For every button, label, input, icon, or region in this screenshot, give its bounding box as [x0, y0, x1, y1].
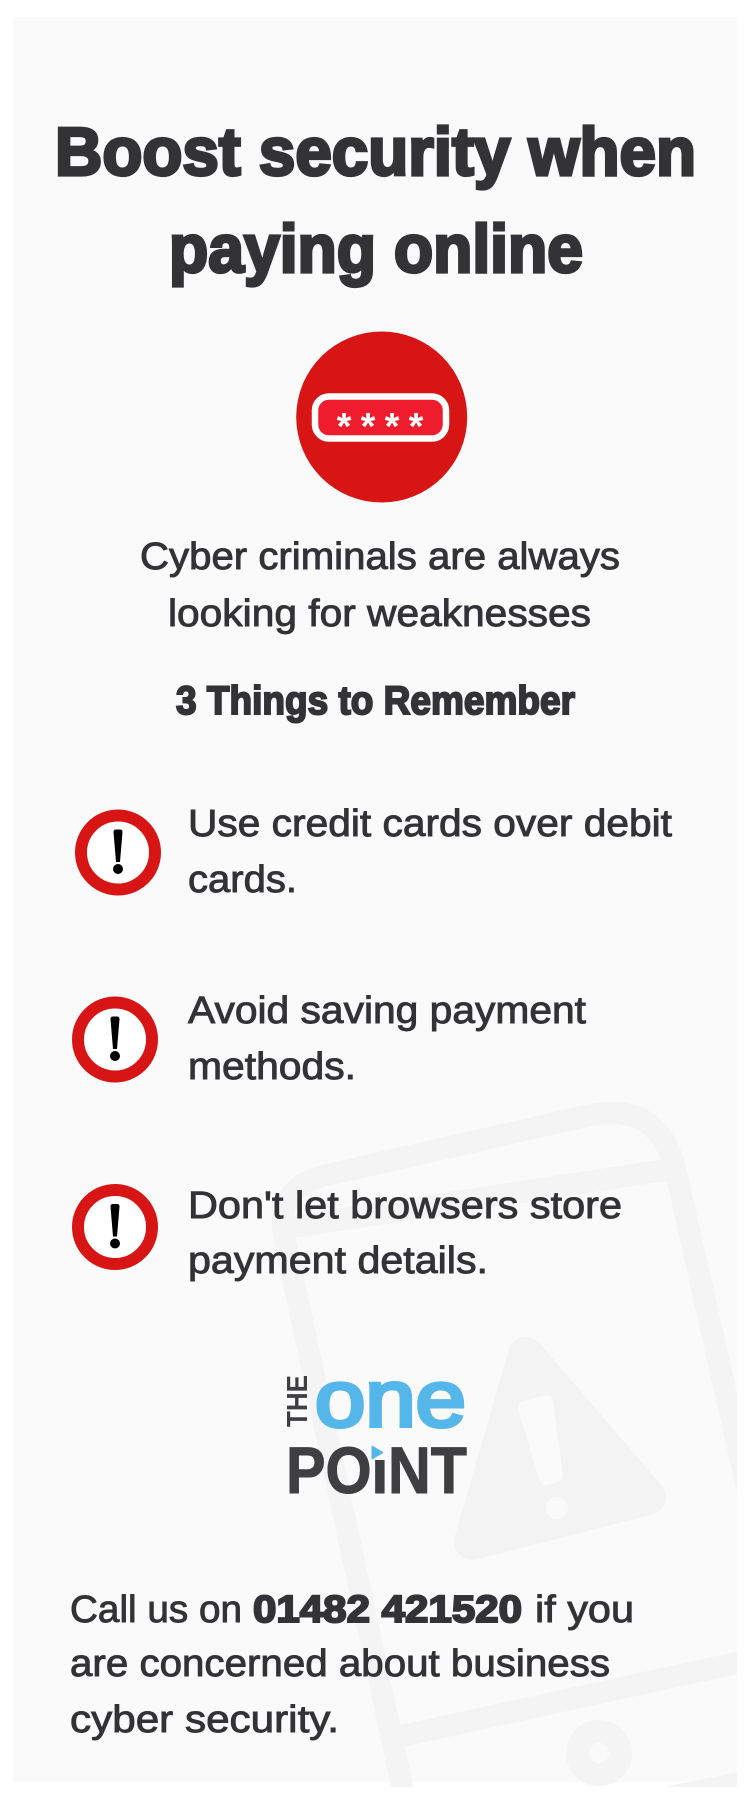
- heading: 3 things: 3 Things to Remember: [176, 679, 575, 723]
- item 2 text: [188, 990, 586, 1088]
- call to action text: [70, 1589, 634, 1741]
- background illustration: phone with warning triangle: [390, 1782, 737, 1787]
- call to action text: are concerned about business: [70, 1643, 610, 1685]
- item 3: warning icon and text: [78, 1185, 622, 1282]
- item 1: warning icon and text: [81, 803, 672, 901]
- icon: password in red circle: *: [361, 406, 376, 448]
- item 1 text: Use credit cards over debit: [188, 803, 672, 845]
- subtitle text: [140, 536, 620, 635]
- title: paying online: [169, 211, 583, 287]
- logo: The One Point: POINT: [286, 1433, 467, 1507]
- icon: password in red circle: [296, 332, 467, 502]
- item 1 text: cards.: [188, 859, 297, 901]
- icon: password in red circle: *: [409, 406, 424, 448]
- logo: The One Point: THE: [282, 1375, 314, 1427]
- icon: warning 2: [78, 1002, 152, 1076]
- item 2 text: methods.: [188, 1046, 356, 1088]
- icon: warning 1: [81, 816, 155, 890]
- item 3 text: payment details.: [188, 1240, 488, 1282]
- logo: The One Point: one: [315, 1354, 466, 1443]
- icon: password in red circle: *: [385, 406, 400, 448]
- subtitle text: looking for weaknesses: [168, 593, 591, 635]
- item 3 text: Don't let browsers store: [188, 1185, 622, 1227]
- title: Boost security when: [55, 114, 696, 190]
- icon: password in red circle: *: [337, 406, 352, 448]
- call to action text: cyber security.: [70, 1699, 339, 1741]
- logo: The One Point: [282, 1354, 467, 1507]
- title: [55, 114, 696, 287]
- subtitle text: Cyber criminals are always: [140, 536, 620, 578]
- call to action text: if you: [535, 1589, 634, 1631]
- icon: warning 3: [78, 1190, 152, 1264]
- item 3 text: [188, 1185, 622, 1282]
- item 2: warning icon and text: [78, 990, 586, 1088]
- item 1 text: [188, 803, 672, 901]
- call to action text: Call us on: [70, 1589, 242, 1631]
- item 2 text: Avoid saving payment: [188, 990, 586, 1032]
- call to action text: 01482 421520: [253, 1589, 522, 1631]
